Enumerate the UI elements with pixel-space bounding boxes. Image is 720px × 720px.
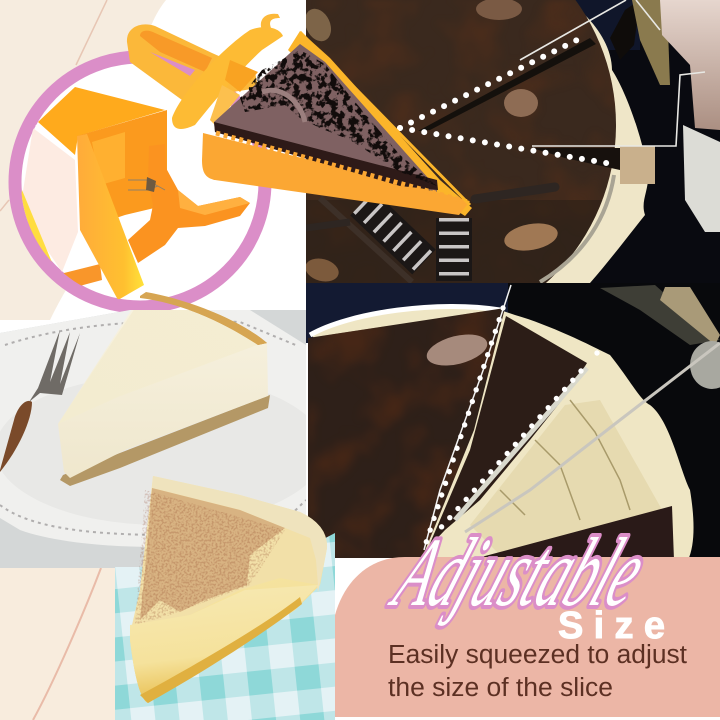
base plate [202, 133, 470, 215]
pie crust rim [152, 476, 327, 592]
chocolate sticks and cookies [475, 187, 555, 199]
pecan [426, 334, 488, 366]
panel: pink caption block [335, 557, 720, 717]
title: Size: Size [558, 605, 665, 647]
photo: bottom cake with dotted slice marks [306, 283, 720, 560]
plate [0, 310, 306, 547]
pie top surface [132, 488, 318, 625]
icon: pink circle with close-up of slicer hinge [15, 57, 265, 307]
panel: bottom-left cream block [0, 567, 116, 720]
metal at top right [600, 285, 720, 345]
dotted lines [400, 35, 587, 128]
panel: slicer product with chocolate slice [127, 14, 472, 216]
chocolate slice [214, 44, 437, 192]
photo: top cake with dotted slice marks [306, 0, 720, 283]
cake body [306, 0, 616, 283]
pecans [476, 0, 522, 20]
serrated front edge [216, 133, 468, 202]
photo: pie on blue gingham cloth [115, 476, 335, 720]
text: description: Easily squeezed to adjust [388, 641, 687, 669]
text: description [388, 641, 687, 702]
text: description: the size of the slice [388, 674, 613, 702]
pie slice [130, 476, 327, 703]
cheesecake [60, 395, 270, 486]
lever front [172, 27, 283, 129]
plate rim light [540, 175, 614, 282]
cheesecake peak over circle [140, 292, 267, 345]
pie filling and base [130, 585, 318, 703]
dark slices [308, 308, 505, 558]
handle back [127, 24, 258, 100]
plate [310, 306, 694, 560]
dots [423, 308, 503, 552]
fork [0, 401, 32, 472]
back serrated edge [288, 31, 472, 216]
blade lines [424, 285, 511, 550]
title: Adjustable script: Adjustable [378, 519, 661, 627]
mousse and crumbs [240, 50, 437, 186]
photo: cheesecake on plate [0, 310, 306, 568]
metal server and hand [610, 4, 637, 50]
